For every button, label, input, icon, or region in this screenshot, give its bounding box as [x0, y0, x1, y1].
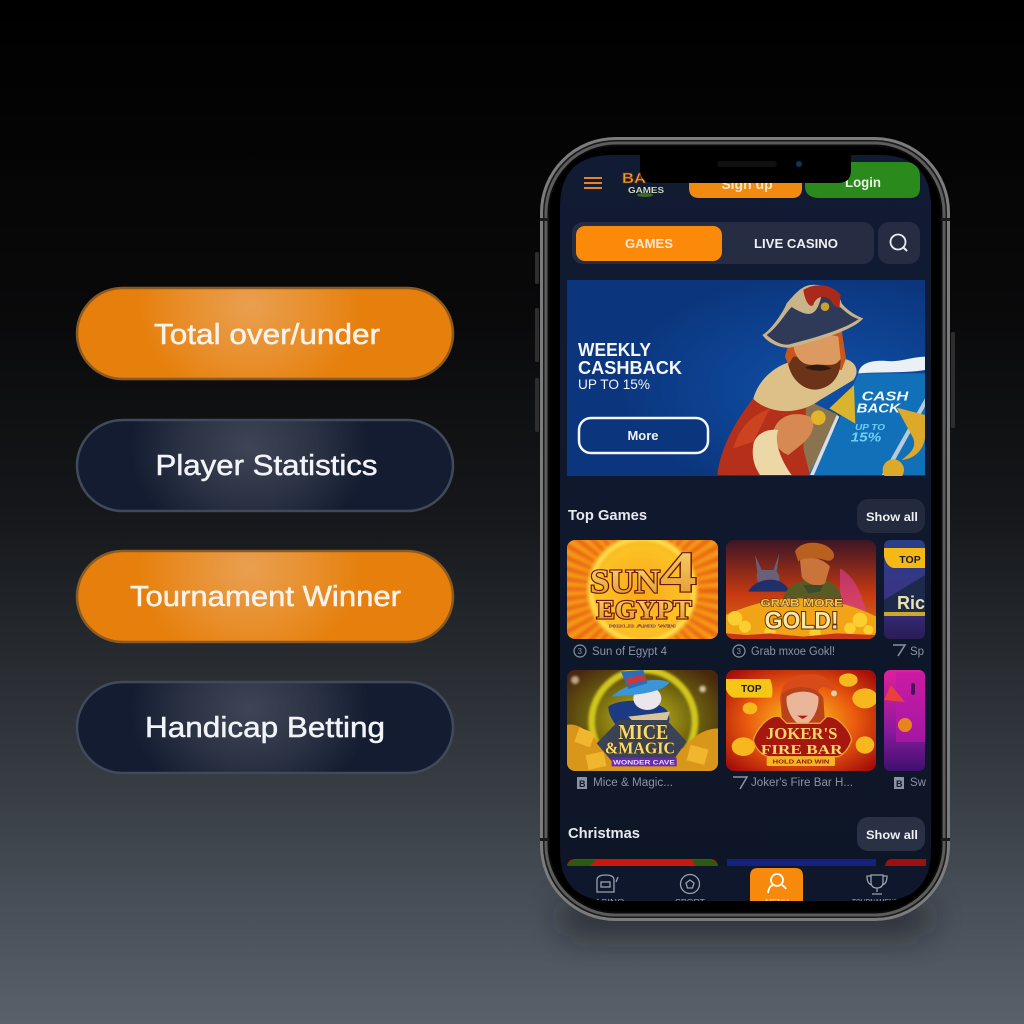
logo [622, 172, 664, 197]
caption: Mice & Magic... [593, 777, 673, 789]
logo: GAMES [628, 186, 665, 195]
game card: Sun of Egypt 4 [567, 540, 718, 658]
game card: partial with TOP badge [884, 540, 925, 658]
icon: hamburger menu [584, 177, 602, 189]
pill: Handicap Betting: Handicap Betting [145, 712, 385, 744]
pirate illustration [717, 285, 863, 475]
caption: Grab mxoe Gokl! [751, 646, 835, 658]
nav: casino icon [588, 875, 624, 907]
game card: Sun of Egypt 4: SUN [590, 563, 660, 600]
button: show all [857, 817, 925, 851]
wizard hat [612, 680, 669, 697]
button: login: Login [845, 174, 881, 190]
cashback card: CASH [862, 389, 909, 403]
side buttons [535, 252, 955, 432]
game card: Joker's Fire Bar: JOKER'S [766, 724, 837, 743]
caption: 3 [736, 647, 742, 656]
app screen [560, 155, 931, 907]
game card: Grab more Gold [725, 540, 877, 658]
button: sign up [689, 183, 802, 198]
phone shadow [560, 900, 930, 936]
beard [788, 357, 841, 390]
nav: sports icon [675, 874, 705, 907]
pill: Handicap Betting [77, 682, 453, 773]
tab: games: GAMES [625, 237, 673, 251]
nav: tournaments icon [852, 875, 902, 907]
hand [773, 414, 813, 455]
caption: Sp [910, 646, 924, 658]
hat [762, 285, 863, 348]
caption: 3 [578, 647, 582, 656]
tab: games [576, 226, 722, 261]
nav: casino icon: CASINO [588, 898, 624, 907]
game card: Mice and Magic: MICE [618, 722, 668, 744]
section header: top games: Top Games [568, 508, 647, 524]
book [628, 712, 670, 725]
fur collar [753, 358, 857, 411]
button: sign up: Sign up [721, 176, 773, 192]
button: more [579, 418, 708, 453]
nav: active account tab [750, 868, 803, 907]
caption: Joker's Fire Bar H... [751, 777, 853, 789]
section header: christmas [568, 817, 925, 851]
nav: active account tab: MENU [765, 898, 789, 907]
promo banner [567, 280, 925, 481]
caption: B [579, 779, 586, 789]
button: show all [857, 499, 925, 533]
button: show all: Show all [866, 828, 918, 842]
fur cuff [753, 430, 792, 475]
game card: partial with TOP badge: TOP [899, 554, 921, 566]
section header: christmas: Christmas [568, 826, 640, 842]
face [793, 335, 841, 365]
game card: Grab more Gold: GOLD! [765, 607, 839, 634]
pill: Player Statistics [77, 420, 453, 511]
search button [878, 222, 920, 264]
coat [717, 397, 817, 475]
game card: Joker's Fire Bar: TOP [741, 684, 762, 695]
game card: Grab more Gold: GRAB MORE [760, 598, 843, 610]
game card: Mice and Magic: &MAGIC [605, 739, 675, 758]
section header: top games [568, 499, 925, 533]
hair [785, 330, 846, 370]
game card: partial pink castle [884, 670, 927, 789]
game card: Joker's Fire Bar [725, 670, 878, 789]
sign [753, 716, 852, 757]
game card: Mice and Magic [567, 670, 718, 789]
mouse body [608, 700, 670, 724]
pill: Tournament Winner: Tournament Winner [130, 581, 401, 613]
shirt [803, 400, 838, 475]
caption [894, 777, 927, 789]
donkey [755, 553, 779, 592]
button: show all: Show all [866, 510, 918, 524]
sign [597, 720, 687, 765]
cashback card [808, 357, 925, 481]
coin pile [725, 598, 877, 640]
cashback card: 15% [851, 431, 881, 445]
app header [584, 160, 920, 198]
tabs: games and live casino [572, 222, 874, 264]
logo: BA [622, 170, 646, 187]
banner heading: UP TO 15% [578, 376, 650, 392]
game card: Joker's Fire Bar: HOLD AND WIN [773, 759, 829, 765]
tab: live casino: LIVE CASINO [754, 237, 838, 251]
banner heading: WEEKLY [578, 340, 651, 360]
game card: Sun of Egypt 4: 4 [660, 540, 697, 605]
feature pills list [77, 288, 453, 773]
man [783, 580, 842, 598]
phone mockup [535, 138, 955, 936]
pill: Total over/under: Total over/under [154, 319, 380, 351]
bottom navigation [560, 866, 931, 907]
pill: Player Statistics: Player Statistics [156, 450, 378, 482]
game card: partial with TOP badge: Ric [897, 593, 925, 613]
cashback card: BACK [857, 401, 901, 415]
phone frame [542, 138, 948, 920]
button: login [805, 162, 920, 198]
game card: Sun of Egypt 4: EGYPT [597, 594, 692, 624]
nav: tournaments icon: TOURNAMENTS [852, 898, 902, 907]
gold cubes [567, 725, 718, 772]
game card: Mice and Magic: WONDER CAVE [613, 759, 675, 766]
pill: Total over/under [77, 288, 453, 379]
game card: Joker's Fire Bar: FIRE BAR [761, 743, 844, 758]
banner heading: CASHBACK [578, 358, 682, 378]
antenna bands [540, 218, 950, 841]
christmas cards peek [567, 859, 926, 866]
notch [640, 150, 851, 183]
top badge [725, 679, 773, 698]
caption: B [896, 779, 903, 789]
cashback card: UP TO [855, 423, 886, 432]
nav: sports icon: SPORT [675, 898, 705, 907]
caption: Sw [910, 777, 927, 789]
pill: Tournament Winner [77, 551, 453, 642]
caption: Sun of Egypt 4 [592, 646, 668, 658]
button: more: More [627, 428, 659, 443]
banner heading [578, 343, 682, 389]
game card: Sun of Egypt 4: HOLD AND WIN [609, 623, 676, 629]
hair [782, 687, 825, 725]
face [786, 692, 819, 726]
coin [811, 410, 826, 425]
jester hat [780, 674, 837, 715]
